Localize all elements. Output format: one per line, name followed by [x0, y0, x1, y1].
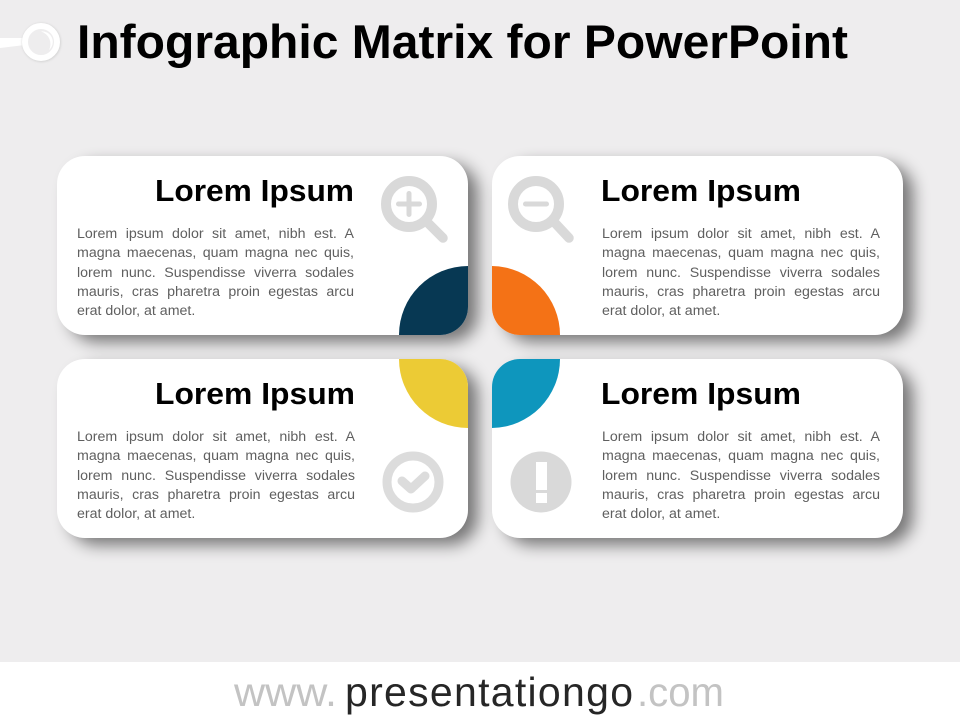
text block: top left: magna maecenas, quam magna nec quis, — [77, 245, 354, 261]
text block: bottom right: mauris, cras pharetra proin egestas arcu — [602, 487, 880, 503]
icon: zoom out — [513, 181, 569, 238]
text block: top left — [77, 225, 354, 325]
panel: top right — [492, 156, 913, 342]
title: Infographic Matrix for PowerPoint — [77, 15, 848, 68]
heading: bottom right: Lorem Ipsum — [601, 376, 801, 411]
text block: bottom left: erat dolor, at amet. — [77, 506, 195, 522]
text block: top right: lorem nunc. Suspendisse viverra sodales — [602, 265, 880, 281]
text block: bottom right: erat dolor, at amet. — [602, 506, 720, 522]
text block: bottom right: lorem nunc. Suspendisse viverra sodales — [602, 468, 880, 484]
text block: top right: magna maecenas, quam magna nec quis, — [602, 245, 880, 261]
text block: top right — [602, 225, 880, 325]
footer: website address: presentationgo — [345, 669, 633, 715]
text block: top left: Lorem ipsum dolor sit amet, nibh est. A — [77, 226, 354, 242]
footer band — [0, 662, 960, 720]
accent: navy leaf — [399, 266, 468, 335]
text block: bottom left: Lorem ipsum dolor sit amet, nibh est. A — [77, 429, 355, 445]
icon: check mark — [387, 456, 439, 508]
footer: website address: www. — [233, 669, 337, 715]
text block: bottom left — [77, 428, 355, 528]
panel: top left — [57, 156, 478, 342]
heading: top left: Lorem Ipsum — [155, 173, 354, 208]
panel: bottom right — [492, 359, 913, 545]
icon: zoom in — [386, 181, 443, 238]
text block: bottom left: magna maecenas, quam magna nec quis, — [77, 448, 355, 464]
logo: white ring with tail — [0, 26, 58, 60]
accent: yellow leaf — [399, 359, 468, 428]
text block: bottom left: lorem nunc. Suspendisse viverra sodales — [77, 468, 355, 484]
accent: blue leaf — [492, 359, 560, 428]
panel: bottom left — [57, 359, 478, 545]
text block: bottom right: Lorem ipsum dolor sit amet, nibh est. A — [602, 429, 880, 445]
text block: bottom left: mauris, cras pharetra proin egestas arcu — [77, 487, 355, 503]
text block: top right: mauris, cras pharetra proin egestas arcu — [602, 284, 880, 300]
text block: top right: Lorem ipsum dolor sit amet, nibh est. A — [602, 226, 880, 242]
heading: top right: Lorem Ipsum — [601, 173, 801, 208]
footer: website address — [233, 669, 724, 715]
footer: website address: .com — [637, 669, 724, 715]
text block: top left: mauris, cras pharetra proin egestas arcu — [77, 284, 354, 300]
text block: top right: erat dolor, at amet. — [602, 303, 720, 319]
heading: bottom left: Lorem Ipsum — [155, 376, 355, 411]
text block: top left: lorem nunc. Suspendisse viverra sodales — [77, 265, 354, 281]
accent: orange leaf — [492, 266, 560, 335]
text block: bottom right — [602, 428, 880, 528]
text block: bottom right: magna maecenas, quam magna nec quis, — [602, 448, 880, 464]
icon: exclamation — [510, 452, 572, 512]
text block: top left: erat dolor, at amet. — [77, 303, 195, 319]
